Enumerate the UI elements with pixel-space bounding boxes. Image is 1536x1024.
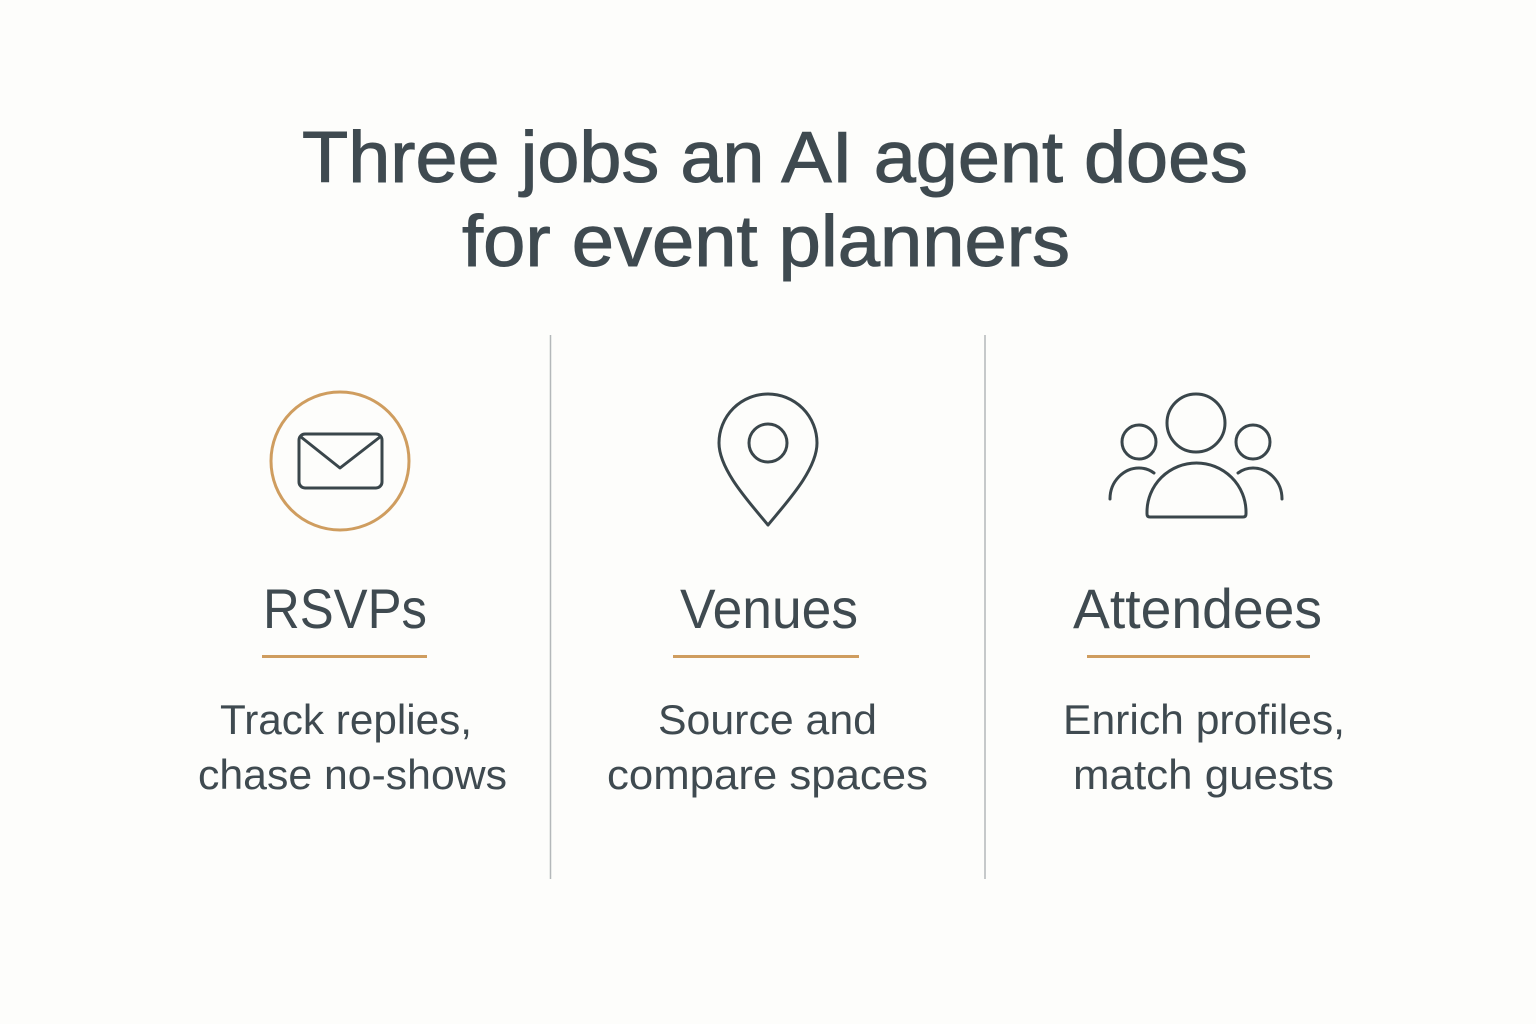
text: Attendees description (1063, 696, 1345, 798)
text: RSVPs description: chase no-shows (198, 751, 507, 798)
text: Venues description (607, 696, 928, 798)
underline: RSVPs (262, 655, 427, 658)
text: Attendees description: Enrich profiles, (1063, 696, 1345, 743)
underline: Venues (673, 655, 859, 658)
text: Venues description: compare spaces (607, 751, 928, 798)
text: RSVPs description: Track replies, (220, 696, 472, 743)
heading: Attendees: Attendees (1073, 577, 1322, 640)
heading: RSVPs: RSVPs (263, 577, 427, 640)
heading: Venues: Venues (680, 577, 858, 640)
text: RSVPs description (198, 696, 507, 798)
text: Attendees description: match guests (1073, 751, 1334, 798)
title: for event planners (462, 202, 1070, 282)
icon: envelope in circle (271, 392, 409, 530)
title (302, 118, 1248, 282)
panel: RSVPs (198, 392, 507, 798)
icon: map pin (719, 394, 817, 525)
underline: Attendees (1087, 655, 1310, 658)
icon: group of people (1110, 394, 1282, 517)
text: Venues description: Source and (658, 696, 877, 743)
title: Three jobs an AI agent does (302, 118, 1248, 198)
panel: Venues (607, 394, 928, 798)
panel: Attendees (1063, 394, 1345, 798)
